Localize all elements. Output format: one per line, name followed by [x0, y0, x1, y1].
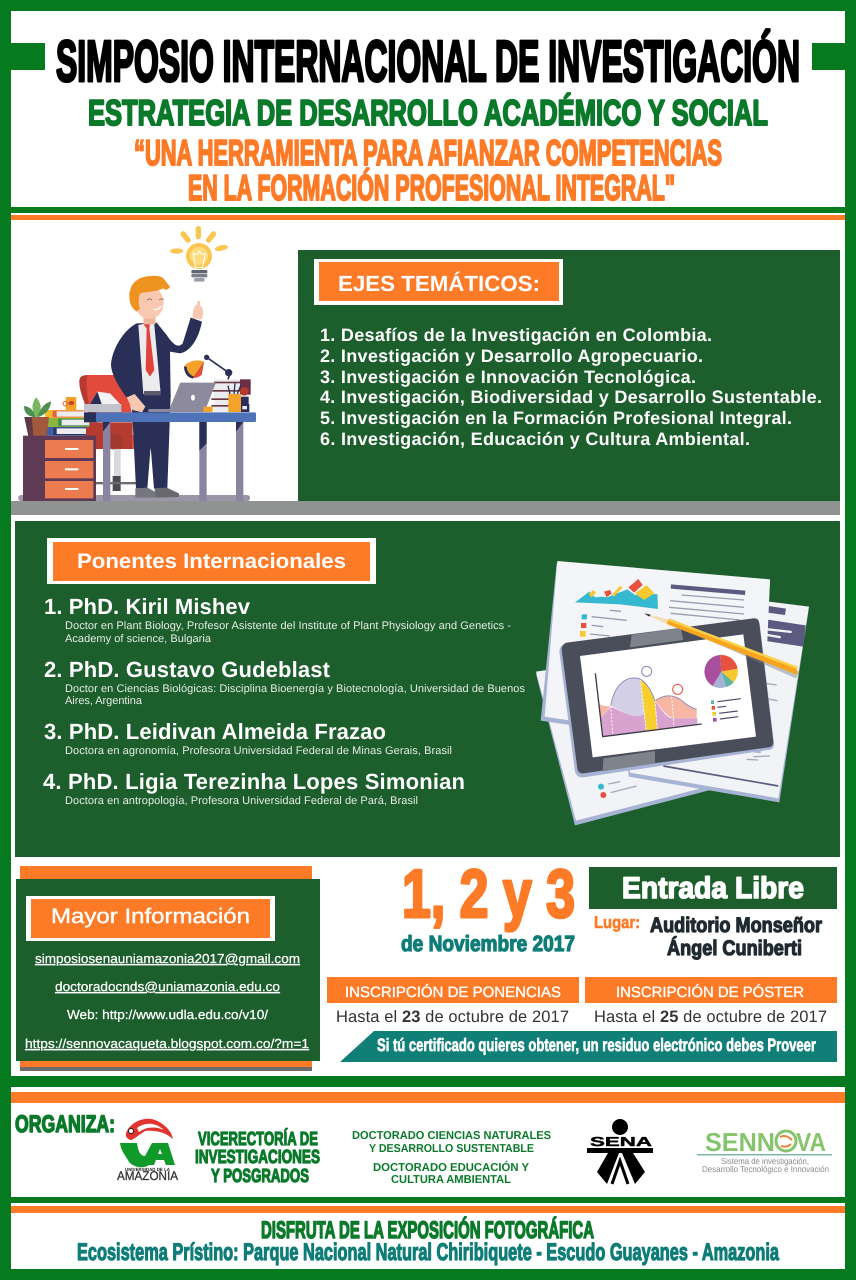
list of themes: 6. Investigación, Educación y Cultura Ambiental. [320, 429, 750, 449]
paper left [536, 650, 713, 825]
list of themes: 3. Investigación e Innovación Tecnológica. [320, 367, 696, 387]
logo: sennova: Desarrollo Tecnológico e Innovación [702, 1164, 829, 1174]
venue [594, 913, 822, 960]
organiza label: ORGANIZA: [15, 1111, 115, 1138]
chair [79, 375, 132, 412]
logo: sennova: SENN [705, 1127, 775, 1157]
logo: universidad de la amazonia [117, 1119, 179, 1183]
list of themes: 2. Investigación y Desarrollo Agropecuario. [320, 346, 703, 366]
vicerrectoría: VICERECTORÍA DE [198, 1128, 318, 1150]
panel: mayor información [16, 866, 320, 1071]
doctorados: DOCTORADO EDUCACIÓN Y [373, 1160, 529, 1174]
list of themes: 5. Investigación en la Formación Profesional Integral. [320, 408, 792, 428]
doctorados [352, 1130, 551, 1186]
inscripción de ponencias: Hasta el 23 de octubre de 2017 [336, 1008, 569, 1026]
illustration: tablet with charts on papers [536, 561, 809, 825]
inscripción de ponencias [327, 977, 579, 1026]
panel: ejes temáticos [298, 250, 840, 501]
mug [66, 397, 76, 410]
logo: sennova [697, 1127, 832, 1174]
list of themes: 4. Investigación, Biodiversidad y Desarrollo Sustentable. [320, 387, 822, 407]
vicerrectoría: Y POSGRADOS [211, 1166, 309, 1187]
cabinet [23, 436, 96, 501]
doctorados: CULTURA AMBIENTAL [391, 1174, 511, 1186]
logo: universidad de la amazonia: AMAZONIA [117, 1169, 179, 1183]
inscripción de póster [585, 977, 837, 1026]
person [132, 395, 171, 488]
speaker 3: 3. PhD. Leidivan Almeida Frazao [44, 719, 386, 744]
speaker 2: Doctor en Ciencias Biológicas: Disciplina Bioenergía y Biotecnología, Universidad de Buenos [65, 683, 526, 695]
vicerrectoría [195, 1128, 320, 1187]
contact links [25, 951, 309, 1051]
tagline [134, 132, 722, 208]
heading: mayor información: Mayor Información [51, 905, 250, 928]
exhibition band [11, 1206, 845, 1213]
exhibition text [77, 1216, 779, 1266]
contact links: https://sennovacaqueta.blogspot.com.co/?m=1 [25, 1036, 309, 1051]
contact links: simposiosenauniamazonia2017@gmail.com [35, 951, 300, 966]
desk items [214, 379, 241, 412]
exhibition text: DISFRUTA DE LA EXPOSICIÓN FOTOGRÁFICA [261, 1216, 594, 1244]
logo: sennova: VA [796, 1127, 826, 1157]
plant [24, 406, 36, 417]
inscripción de ponencias: INSCRIPCIÓN DE PONENCIAS [345, 983, 561, 1001]
line chart [611, 678, 655, 716]
header divider [11, 215, 845, 220]
speaker 1: Academy of science, Bulgaria [65, 633, 212, 645]
logo: universidad de la amazonia: UNIVERSIDAD DE LA [125, 1167, 171, 1172]
tablet [559, 621, 774, 777]
heading: ponentes internacionales [47, 538, 376, 584]
venue: Ángel Cuniberti [667, 936, 802, 960]
speaker 4 [43, 769, 465, 807]
logo: sena [587, 1119, 653, 1184]
logo: sena: SENA [590, 1134, 653, 1149]
pie chart [704, 655, 738, 688]
event dates: 1, 2 y 3 [402, 856, 575, 932]
organizers band [11, 1092, 845, 1103]
logo: sennova: Sistema de investigación, [721, 1156, 809, 1166]
desk [84, 412, 97, 422]
speaker 3: Doctora en agronomía, Profesora Universidad Federal de Minas Gerais, Brasil [65, 745, 452, 757]
entrada libre [589, 867, 837, 909]
header tabs [11, 43, 845, 70]
speaker 4: 4. PhD. Ligia Terezinha Lopes Simonian [43, 769, 465, 794]
speaker 1: Doctor en Plant Biology, Profesor Asistente del Institute of Plant Physiology and Genetics - [65, 620, 511, 632]
heading: ejes temáticos: EJES TEMÁTICOS: [338, 271, 540, 296]
contact links: Web: http://www.udla.edu.co/v10/ [67, 1007, 268, 1022]
papers on chair [90, 392, 120, 404]
bulb [170, 226, 228, 282]
doctorados: Y DESARROLLO SUSTENTABLE [369, 1143, 534, 1155]
list of themes [320, 325, 822, 449]
pencil [668, 618, 799, 678]
panel: ponentes internacionales [15, 521, 840, 857]
illustration: businessman at desk [18, 226, 256, 501]
books [45, 410, 84, 418]
inscripción de póster: Hasta el 25 de octubre de 2017 [594, 1008, 827, 1026]
vicerrectoría: INVESTIGACIONES [195, 1147, 320, 1168]
heading: ponentes internacionales: Ponentes Internacionales [77, 550, 346, 573]
list of themes: 1. Desafíos de la Investigación en Colombia. [320, 325, 712, 345]
event dates [401, 856, 575, 956]
lamp [207, 357, 230, 379]
speaker 1 [44, 594, 511, 645]
venue: Lugar: [594, 913, 640, 932]
speaker 2: 2. PhD. Gustavo Gudeblast [44, 657, 331, 682]
heading: mayor información [26, 896, 275, 941]
heading: ejes temáticos [314, 259, 563, 305]
floor band [11, 501, 840, 515]
speaker 1: 1. PhD. Kiril Mishev [44, 594, 251, 619]
speaker 2: Aires, Argentina [65, 695, 143, 707]
doctorados: DOCTORADO CIENCIAS NATURALES [352, 1130, 551, 1142]
event dates: de Noviembre 2017 [401, 931, 575, 956]
certificate banner [340, 1031, 837, 1062]
entrada libre: Entrada Libre [622, 872, 804, 905]
speaker 2 [44, 657, 526, 707]
speaker 4: Doctora en antropología, Profesora Universidad Federal de Pará, Brasil [65, 795, 418, 807]
speaker 3 [44, 719, 452, 757]
inscripción de póster: INSCRIPCIÓN DE PÓSTER [616, 983, 804, 1001]
paper right [620, 585, 809, 802]
paper top [541, 563, 770, 753]
contact links: doctoradocnds@uniamazonia.edu.co [55, 979, 280, 994]
venue: Auditorio Monseñor [650, 914, 822, 937]
